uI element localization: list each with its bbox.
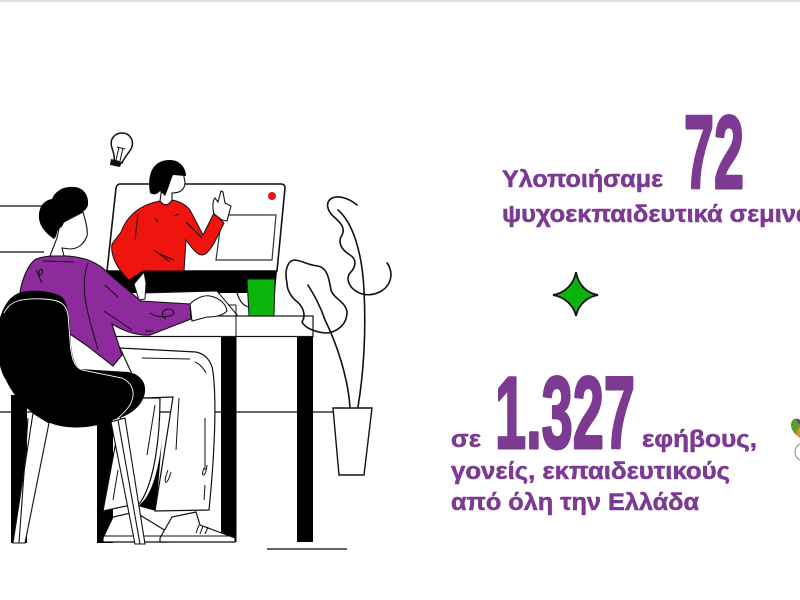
woman hair: [149, 160, 186, 196]
plant: [286, 197, 391, 475]
text block: seminars: [502, 95, 800, 228]
number 1.327: 1.327: [495, 356, 635, 470]
curly vine: [328, 197, 391, 295]
monitor screen black band: [107, 271, 277, 293]
icon: green sparkle: [553, 272, 598, 316]
illustration: video seminar at desk: [0, 133, 391, 549]
lower hand: [134, 272, 146, 300]
chair front legs: [13, 413, 145, 544]
screen window: [216, 215, 276, 260]
man's neck and face: [50, 212, 87, 256]
woman on screen: [112, 160, 231, 300]
broad leaf: [286, 260, 347, 333]
woman neck and face: [160, 172, 185, 205]
chair highlight: [4, 299, 133, 419]
red sweater: [112, 200, 224, 280]
line: γονείς, εκπαιδευτικούς: γονείς, εκπαιδευτικούς: [451, 458, 730, 485]
green cup: [247, 279, 275, 316]
word: εφήβους: εφήβους,: [642, 426, 757, 453]
desk: [107, 305, 313, 542]
raised hand: [213, 191, 231, 221]
stems: [308, 210, 365, 408]
number 72: 72: [684, 95, 744, 211]
purple sweater: [20, 256, 191, 366]
wall and floor lines: [0, 206, 347, 549]
line: από όλη την Ελλάδα: από όλη την Ελλάδα: [451, 489, 699, 516]
flower pot: [333, 408, 372, 475]
icon: light bulb: [110, 133, 132, 167]
chair seat and back: [0, 291, 145, 427]
monitor: [107, 184, 285, 293]
man's hand: [190, 296, 227, 321]
text block: participants: [451, 356, 757, 516]
line: Υλοποιήσαμε: Υλοποιήσαμε: [502, 166, 663, 193]
logo: partial heart mark: [791, 419, 800, 461]
red dot: [268, 192, 276, 200]
trousers: [103, 348, 215, 511]
paper on desk: [115, 291, 238, 336]
dark trouser gap: [138, 440, 162, 511]
cable: [237, 293, 248, 307]
chair back legs: [11, 395, 113, 543]
word: σε: σε: [451, 426, 481, 453]
man: [0, 187, 236, 544]
man's hair: [39, 187, 88, 239]
shoes: [100, 512, 236, 542]
sweater details: [36, 261, 174, 350]
